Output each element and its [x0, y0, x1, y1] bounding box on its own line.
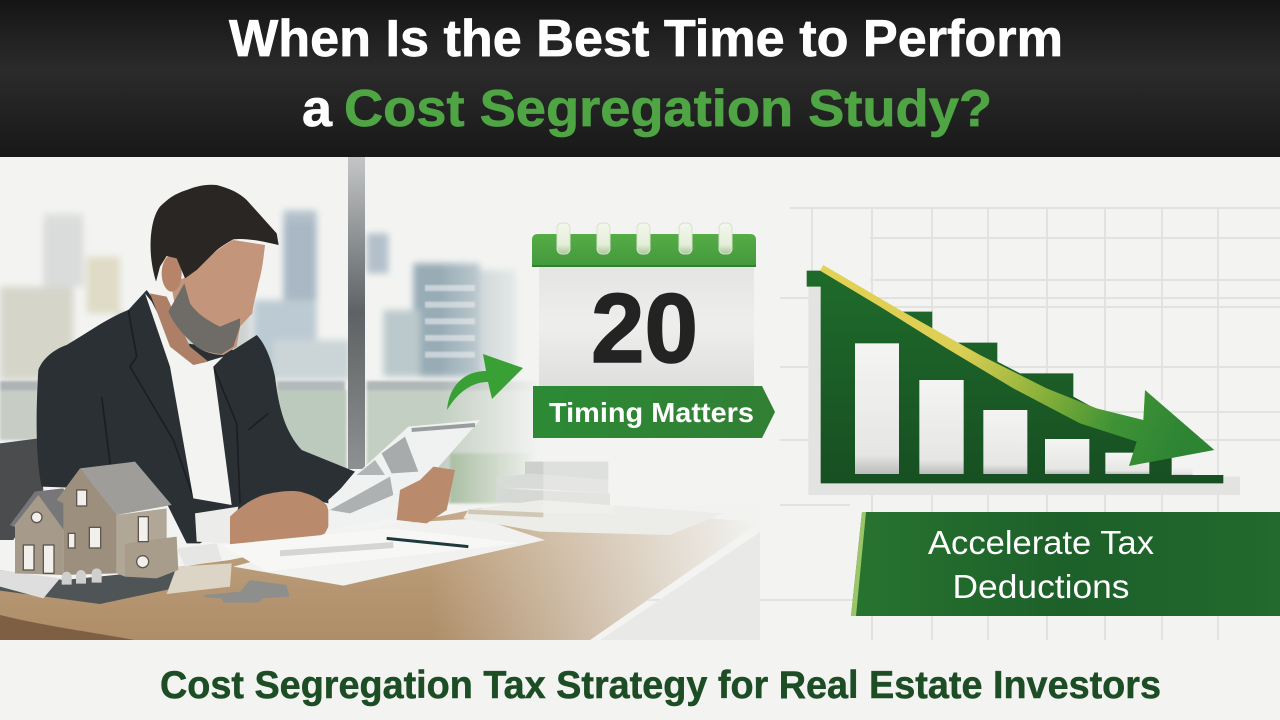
office window background: [0, 157, 598, 507]
white shirt: [145, 293, 232, 505]
calendar rings: [557, 223, 732, 254]
title: When Is the Best Time to Perform: [229, 10, 1063, 68]
man in suit reading documents: [0, 185, 355, 545]
header band: [0, 0, 1280, 157]
papers and pen on desk: [222, 420, 545, 586]
held document: [328, 420, 480, 530]
roof: [80, 462, 172, 515]
folders: [0, 568, 183, 604]
title: Cost Segregation Study?: [344, 80, 992, 138]
timing matters banner: Timing Matters: [549, 397, 754, 428]
desk: [0, 505, 760, 640]
accelerate tax deductions banner: Accelerate Tax: [928, 524, 1155, 561]
jacket shadows and lapels: [102, 310, 268, 503]
chart frame: [808, 287, 1240, 495]
jacket: [37, 290, 355, 543]
footer band: [0, 640, 1280, 720]
calendar page: [539, 262, 754, 390]
ear: [162, 255, 182, 292]
extension: [125, 537, 178, 578]
dark green stepped area: [807, 271, 1223, 483]
descending bar chart: [807, 265, 1240, 495]
accelerate tax deductions banner: Deductions: [952, 568, 1130, 605]
trend arrow: [820, 265, 1214, 466]
accelerate tax deductions banner: [851, 512, 1280, 616]
face: [170, 240, 265, 355]
title: [229, 10, 1063, 138]
left wing: [10, 488, 78, 575]
main background: [0, 157, 1280, 640]
hair: [151, 185, 279, 282]
stacked folders: [463, 458, 723, 535]
neck: [150, 293, 208, 365]
calendar number: 20: [591, 273, 698, 383]
chart grid background: [580, 208, 1280, 640]
beard: [168, 283, 240, 354]
house model on folders: [0, 462, 289, 604]
second hand: [397, 467, 455, 523]
keys: [204, 580, 289, 603]
main house wall: [57, 468, 117, 575]
title: a: [302, 80, 333, 138]
calendar header: [532, 234, 756, 267]
footer subtitle: Cost Segregation Tax Strategy for Real Estate Investors: [160, 664, 1161, 707]
icon: curved green arrow: [447, 354, 523, 410]
timing matters banner: [533, 386, 775, 438]
office chair: [0, 438, 43, 540]
hand on paper: [230, 491, 332, 545]
shirt cuff: [195, 507, 238, 543]
calendar: [532, 223, 775, 438]
bars: [855, 343, 1193, 475]
